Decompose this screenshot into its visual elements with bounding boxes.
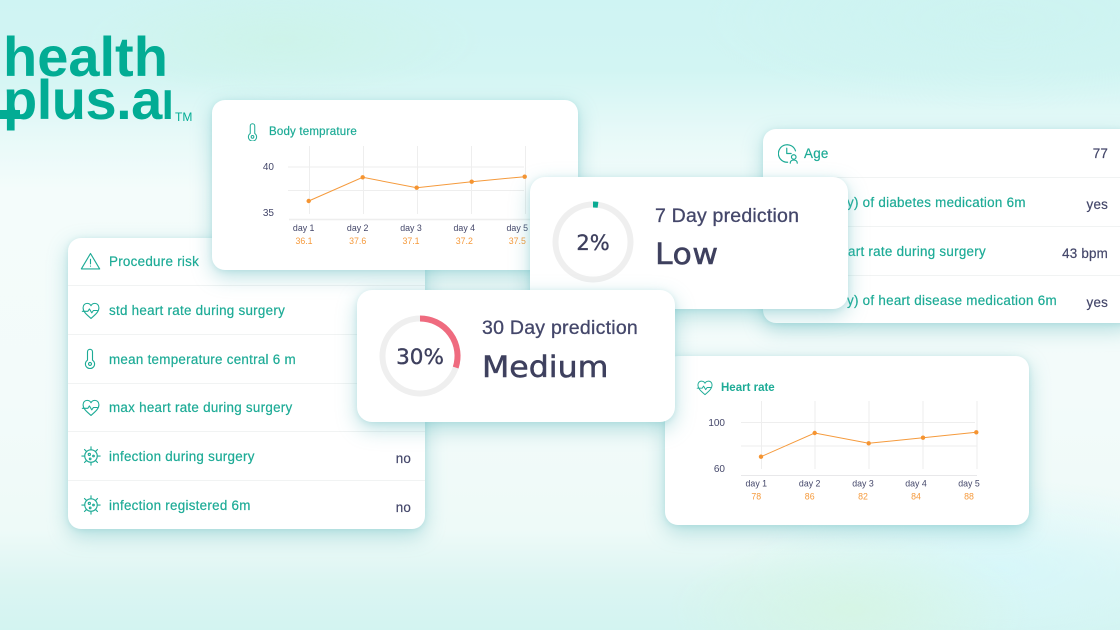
row: diabetes medication — [763, 178, 1120, 227]
line chart: heart rate: day 5 — [958, 478, 980, 488]
row: age: 77 — [1093, 146, 1108, 161]
panel: body temperature chart — [212, 100, 578, 270]
row: infection during surgery: infection during surgery — [109, 449, 255, 464]
line chart: body temperature: 37.6 — [349, 236, 366, 246]
icon: virus — [81, 446, 101, 466]
row: mean temperature — [68, 335, 425, 384]
line chart: body temperature: 37.5 — [509, 236, 526, 246]
panel: procedure risk list — [68, 238, 425, 529]
row: infection registered: infection registered 6m — [109, 498, 251, 513]
icon: thermometer — [248, 123, 258, 141]
row: procedure risk: Procedure risk — [109, 254, 199, 269]
line chart: body temperature: 40 — [263, 162, 274, 173]
line chart: body temperature: 36.1 — [295, 236, 313, 246]
line chart: heart rate: day 3 — [852, 478, 874, 488]
line chart: body temperature — [263, 146, 530, 246]
line chart: heart rate: 88 — [964, 492, 974, 502]
row: heart rate during surgery: art rate during surgery — [848, 244, 986, 259]
line chart: body temperature: day 3 — [400, 223, 422, 233]
line chart: heart rate: 100 — [708, 418, 725, 429]
donut: 30 percent — [380, 316, 461, 396]
line chart: heart rate: 84 — [911, 492, 921, 502]
row: infection during surgery — [68, 432, 425, 481]
row: diabetes medication: y) of diabetes medication 6m — [847, 195, 1026, 210]
row: std heart rate: std heart rate during surgery — [109, 303, 285, 318]
donut: 2 percent: 2% — [576, 231, 610, 255]
icon: age clock — [778, 144, 798, 164]
row: heart disease medication: y) of heart disease medication 6m — [847, 293, 1057, 308]
line chart: body temperature: 37.2 — [456, 236, 473, 246]
line chart: heart rate — [708, 401, 980, 502]
row: infection registered: no — [396, 500, 411, 515]
row: heart rate during surgery — [763, 227, 1120, 276]
icon: heart rate — [82, 400, 100, 416]
line chart: heart rate: 82 — [858, 492, 868, 502]
logo: health plus.ai: health — [3, 25, 168, 88]
heading: heart rate: Heart rate — [721, 382, 775, 394]
line chart: body temperature: 37.1 — [402, 236, 420, 246]
line chart: heart rate: day 4 — [905, 478, 927, 488]
heading: 7 day prediction: 7 Day prediction — [655, 205, 799, 227]
icon: heart rate — [696, 380, 712, 396]
line chart: body temperature: 35 — [263, 208, 274, 219]
panel: patient attributes list — [763, 129, 1120, 323]
icon: virus — [81, 495, 101, 515]
risk level: low: Low — [655, 237, 719, 271]
row: diabetes medication: yes — [1087, 197, 1108, 212]
line chart: heart rate: day 2 — [799, 478, 821, 488]
line chart: body temperature: day 2 — [347, 223, 369, 233]
row: heart rate during surgery: 43 bpm — [1062, 246, 1108, 261]
icon: heart rate — [82, 302, 100, 319]
row: max heart rate — [68, 383, 425, 432]
heading: body temperature: Body temprature — [269, 126, 357, 138]
risk level: medium: Medium — [482, 350, 608, 384]
donut: 2 percent — [552, 202, 634, 282]
donut: 30 percent: 30% — [396, 345, 444, 370]
line chart: body temperature: day 4 — [454, 223, 475, 233]
row: mean temperature: mean temperature central 6 m — [109, 352, 296, 367]
line chart: heart rate: 60 — [714, 464, 725, 475]
logo: health plus.ai: plus.aI — [3, 68, 173, 131]
icon: thermometer — [84, 348, 96, 369]
line chart: body temperature: day 1 — [293, 223, 315, 233]
icon: warning triangle — [80, 252, 100, 270]
row: age: Age — [804, 146, 829, 161]
line chart: heart rate: 78 — [751, 492, 761, 502]
row: std heart rate — [68, 286, 425, 335]
logo: health plus.ai — [0, 25, 192, 131]
panel: 30 day prediction — [357, 290, 675, 422]
row: max heart rate: max heart rate during surgery — [109, 400, 292, 415]
row: procedure risk — [68, 238, 425, 286]
line chart: body temperature: day 5 — [507, 223, 528, 233]
row: infection registered — [81, 495, 411, 515]
panel: heart rate chart — [665, 356, 1029, 525]
logo: health plus.ai: TM — [175, 110, 192, 124]
line chart: heart rate: 86 — [805, 492, 815, 502]
row: heart disease medication — [847, 293, 1108, 310]
panel: 7 day prediction — [530, 177, 848, 309]
row: age — [763, 129, 1120, 178]
row: heart disease medication: yes — [1087, 295, 1108, 310]
heading: 30 day prediction: 30 Day prediction — [482, 317, 638, 339]
row: infection during surgery: no — [396, 451, 411, 466]
line chart: heart rate: day 1 — [746, 478, 767, 488]
